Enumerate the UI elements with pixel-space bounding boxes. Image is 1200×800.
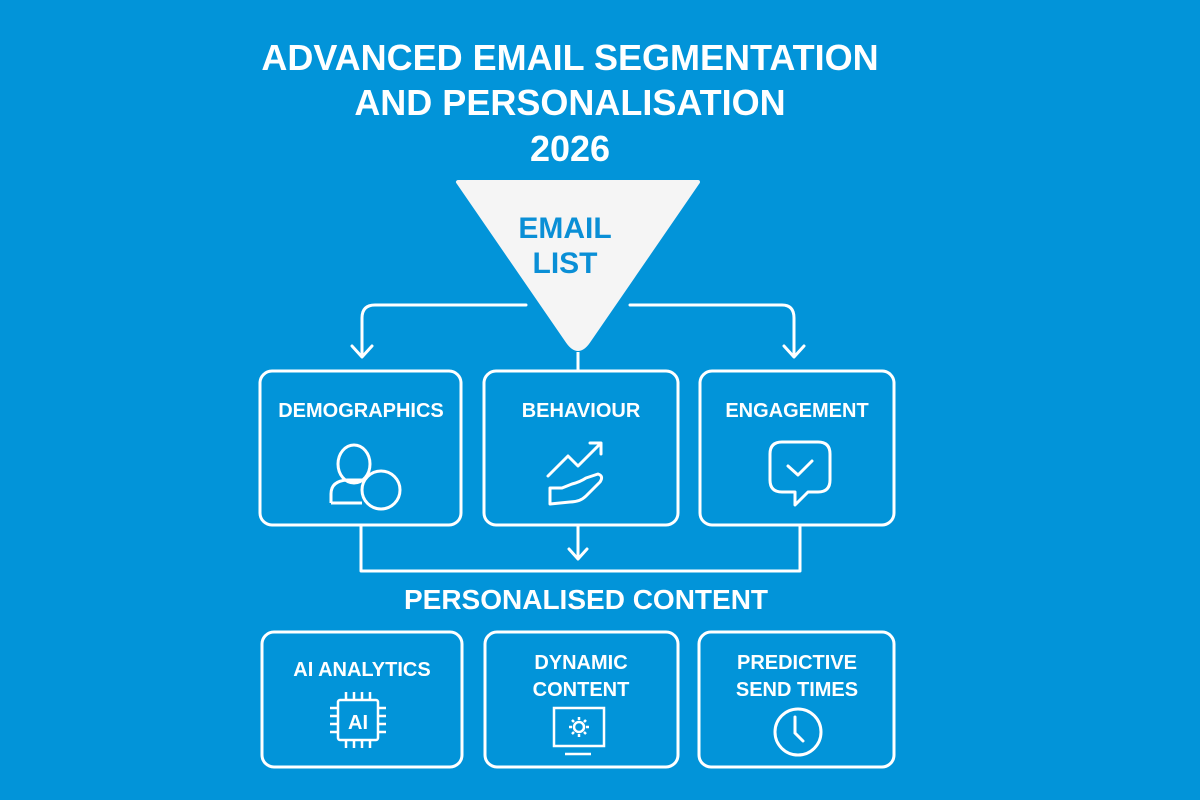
title: 2026 [530, 128, 610, 169]
box: demographics [260, 371, 461, 525]
box: ai analytics: AI ANALYTICS [293, 659, 431, 681]
box: dynamic content [485, 632, 678, 767]
icon: monitor gear [554, 708, 604, 754]
icon: users [331, 445, 400, 509]
icon: clock [775, 709, 821, 755]
box: predictive send times [699, 632, 894, 767]
arrow: to engagement [630, 305, 804, 357]
title [261, 37, 879, 169]
title: AND PERSONALISATION [354, 82, 786, 123]
icon: ai chip: AI [348, 712, 368, 734]
box: engagement [700, 371, 894, 525]
arrow: to demographics [352, 305, 526, 357]
box: demographics: DEMOGRAPHICS [278, 400, 444, 422]
icon: ai chip [330, 692, 386, 748]
box: dynamic content: CONTENT [533, 679, 629, 701]
funnel: email list: EMAIL [518, 212, 612, 245]
title: ADVANCED EMAIL SEGMENTATION [261, 37, 879, 78]
box: predictive send times: PREDICTIVE [737, 652, 857, 674]
icon: chat check [770, 442, 830, 505]
funnel: email list: LIST [532, 247, 598, 280]
icon: growth hand [548, 443, 602, 504]
funnel: email list [458, 182, 698, 349]
box: behaviour [484, 371, 678, 525]
heading: personalised content: PERSONALISED CONTENT [404, 584, 768, 615]
box: ai analytics [262, 632, 462, 767]
box: predictive send times: SEND TIMES [736, 679, 858, 701]
box: behaviour: BEHAVIOUR [522, 400, 641, 422]
connector: segments to personalised content [361, 526, 800, 571]
box: dynamic content: DYNAMIC [534, 652, 628, 674]
connector: funnel to behaviour [576, 352, 580, 370]
box: engagement: ENGAGEMENT [725, 400, 869, 422]
